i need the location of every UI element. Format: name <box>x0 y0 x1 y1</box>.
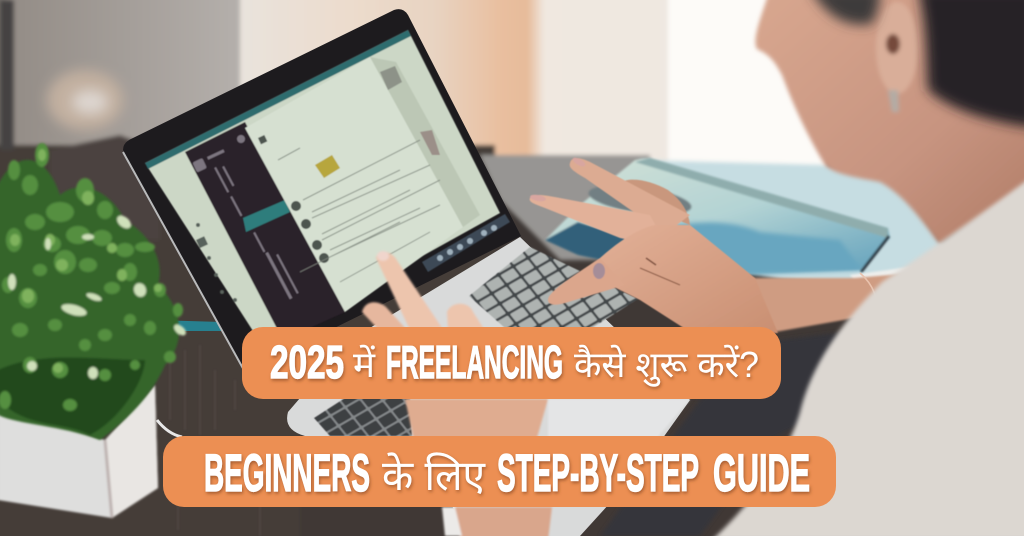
chat window <box>245 57 463 312</box>
sidebar <box>185 122 345 340</box>
bracelet <box>860 273 878 320</box>
person: face and neck <box>755 0 1024 245</box>
laptop base <box>287 237 690 536</box>
teal pen on the desk <box>154 320 222 331</box>
tablet on the desk <box>545 158 890 276</box>
right hand on the keyboard <box>530 156 778 333</box>
dock <box>422 214 510 272</box>
banner text line two: के लिए <box>382 452 486 499</box>
left hand over the keyboard <box>362 251 690 536</box>
wooden table grain <box>170 345 260 536</box>
browser bar <box>145 30 411 169</box>
right arm <box>745 272 925 332</box>
banner text line one: में <box>353 344 377 385</box>
ear <box>876 2 918 94</box>
keyboard lower <box>314 398 412 436</box>
banner: Beginners के लिए Step-by-Step Guide <box>163 436 836 507</box>
banner text line one: 2025 <box>270 336 344 388</box>
banner text line one <box>270 336 759 388</box>
laptop screen <box>145 30 510 345</box>
banner text line two: GUIDE <box>713 444 810 503</box>
person: hair <box>810 0 1024 128</box>
banner text line two: STEP-BY-STEP <box>497 444 699 503</box>
banner text line two: BEGINNERS <box>204 444 370 503</box>
person: sweater <box>712 178 1024 536</box>
laptop <box>123 9 690 536</box>
banner: 2025 में Freelancing कैसे शुरू करें? <box>242 327 781 399</box>
dark fabric near the sleeve <box>600 300 880 536</box>
plant pot <box>0 385 158 518</box>
left pane toolbar <box>196 223 237 302</box>
chat text lines <box>278 140 440 282</box>
chat avatars <box>258 135 329 263</box>
white sleeve band <box>850 264 932 282</box>
banner text line one: FREELANCING <box>386 336 563 388</box>
cable <box>157 420 182 437</box>
banner text line one: कैसे शुरू करें? <box>574 344 759 387</box>
keyboard upper <box>469 247 638 328</box>
chat image <box>315 155 340 178</box>
laptop lid bezel <box>123 9 521 372</box>
banner text line two <box>204 444 810 503</box>
plant foliage <box>0 143 188 440</box>
